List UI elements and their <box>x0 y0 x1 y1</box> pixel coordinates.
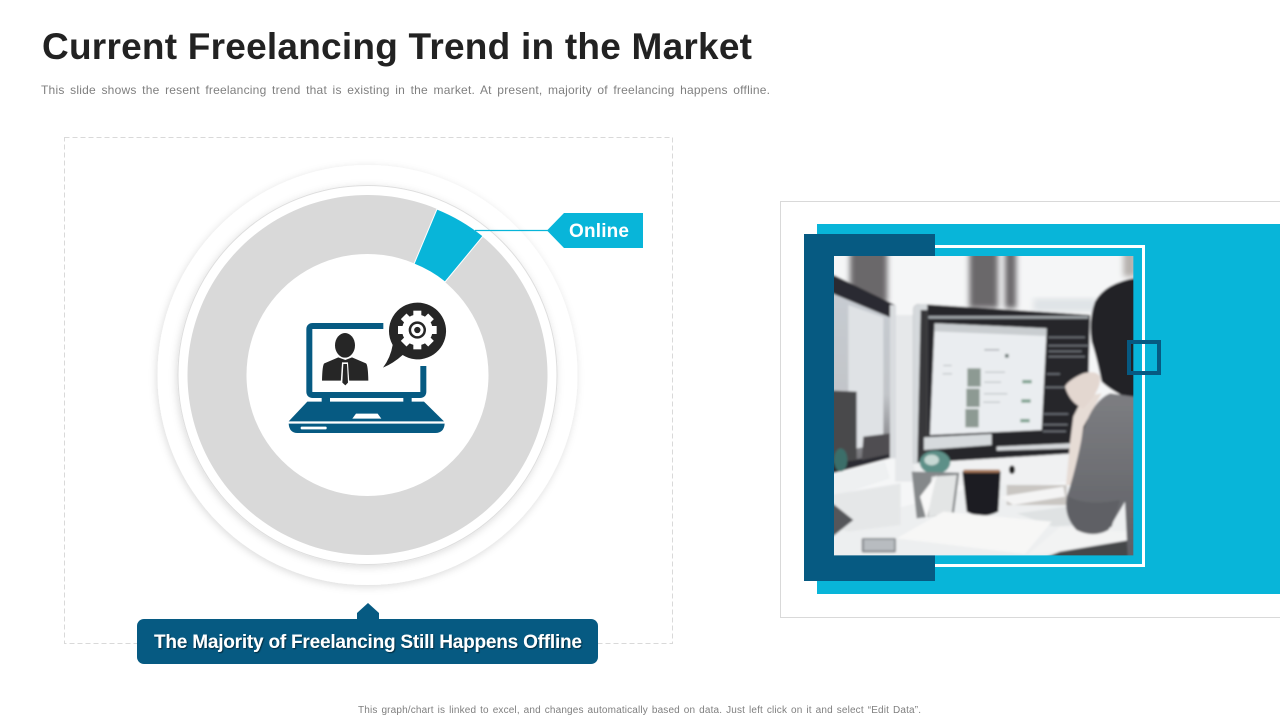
dark blue accent block <box>804 234 935 581</box>
banner body <box>137 619 598 664</box>
accent square <box>1129 342 1159 373</box>
notebook <box>897 512 1052 554</box>
outer photo frame <box>780 202 1280 618</box>
panel: donut chart <box>64 138 672 644</box>
phone <box>862 538 896 553</box>
cyan background block <box>817 224 1280 594</box>
panel: photo composition <box>780 202 1280 618</box>
online tag <box>547 213 643 248</box>
donut chart <box>188 195 548 555</box>
leader line <box>475 230 549 232</box>
white line frame <box>935 246 1144 566</box>
inner decorative ring <box>178 186 557 564</box>
monitor code lines <box>1043 337 1088 432</box>
banner pointer <box>357 603 379 620</box>
glass ornament and cup <box>920 451 950 474</box>
title: Current Freelancing Trend in the Market <box>42 26 752 67</box>
callout: online label <box>475 213 643 248</box>
icon: online freelancer laptop <box>289 303 446 433</box>
photo: woman at computer desk <box>834 256 1134 556</box>
laptop slot <box>301 427 327 429</box>
gear <box>398 311 437 349</box>
segment: offline <box>188 195 548 555</box>
laptop hinges <box>322 397 412 402</box>
segment: online <box>414 209 483 282</box>
online text: Online <box>569 221 629 242</box>
woman: sweater <box>1064 392 1134 556</box>
left monitor <box>834 274 895 474</box>
lower monitor panels <box>924 434 992 450</box>
laptop screen outline <box>309 326 423 395</box>
woman: hair <box>1088 277 1134 398</box>
room background <box>834 256 1134 546</box>
subtitle: This slide shows the resent freelancing trend that is existing in the market. At present, majority of freelancing happens offline. <box>41 83 770 97</box>
laptop base <box>289 402 444 421</box>
woman: arm and hand <box>1066 393 1102 485</box>
person torso <box>322 357 368 381</box>
speech bubble <box>383 303 446 368</box>
callout: offline banner <box>137 603 598 664</box>
apple logo <box>1009 465 1015 474</box>
browser product thumbnails <box>965 368 981 427</box>
left paper stack <box>820 462 890 502</box>
centre monitor body <box>913 304 1090 463</box>
footer note: This graph/chart is linked to excel, and changes automatically based on data. Just left click on it and select “Edit Data”. <box>358 705 921 716</box>
monitor chin <box>913 453 1087 485</box>
dark window panes <box>846 256 1134 312</box>
dashed chart frame <box>64 138 672 644</box>
laptop trackpad <box>352 414 381 419</box>
person head <box>335 333 355 358</box>
monitor browser window <box>930 323 1047 435</box>
person tie <box>341 362 349 387</box>
desk <box>820 483 1140 570</box>
banner text: The Majority of Freelancing Still Happens Offline <box>154 632 582 653</box>
outer decorative ring <box>158 165 578 585</box>
